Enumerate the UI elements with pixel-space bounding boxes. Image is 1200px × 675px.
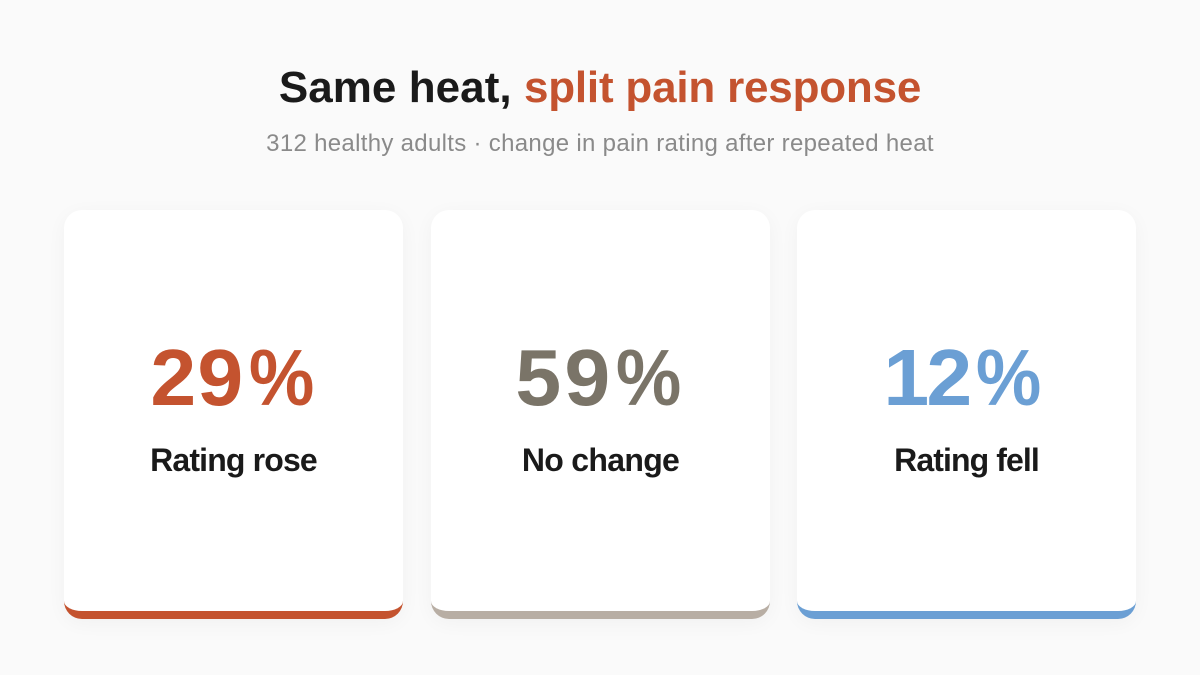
stat: 29%: 2 <box>150 333 196 422</box>
stat: 59%: 9 <box>564 333 610 422</box>
stat: 12%: 2 <box>926 333 972 422</box>
panel: rating fell <box>797 210 1136 619</box>
stat: 12%: 1 <box>883 333 929 422</box>
stat: 29% <box>150 333 314 422</box>
label: rating fell: Rating fell <box>894 442 1039 478</box>
stat: 59%: 5 <box>515 333 561 422</box>
panel: no change <box>431 210 770 619</box>
label: rating rose: Rating rose <box>150 442 317 478</box>
panel: rating rose <box>64 210 403 619</box>
stat: 12% <box>883 333 1041 422</box>
stat: 29%: 9 <box>197 333 243 422</box>
title: Same heat, split pain response <box>279 63 921 112</box>
stat: 59%: % <box>616 333 681 422</box>
subtitle: 312 healthy adults · change in pain rating after repeated heat <box>266 130 934 157</box>
stat: 12%: % <box>976 333 1041 422</box>
label: no change: No change <box>522 442 679 478</box>
stat: 29%: % <box>249 333 314 422</box>
stat: 59% <box>515 333 681 422</box>
